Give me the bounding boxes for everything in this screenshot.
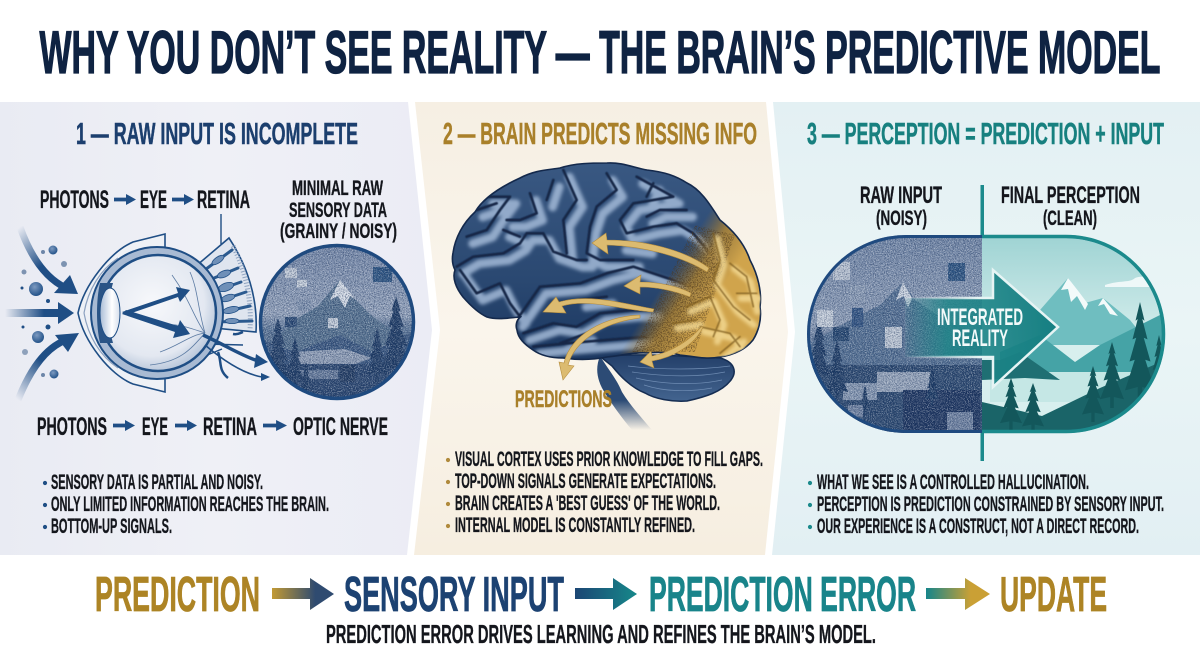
bullet list: panel 2: TOP-DOWN SIGNALS GENERATE EXPECTATIONS. (455, 469, 716, 493)
bullet list: panel 1: BOTTOM-UP SIGNALS. (51, 514, 172, 538)
arrow: prediction to sensory input (272, 578, 334, 610)
footer flow: prediction loop (95, 567, 1107, 622)
capsule: raw versus clean scene (805, 233, 1170, 435)
label: minimal raw sensory data: MINIMAL RAW (292, 177, 383, 200)
panel: brain predicts missing info: VISUAL CORTEX USES PRIOR KNOWLEDGE TO FILL GAPS. (455, 447, 763, 471)
label: minimal raw sensory data: SENSORY DATA (289, 199, 387, 222)
label: raw input noisy: RAW INPUT (860, 182, 942, 209)
step: update: UPDATE (1000, 567, 1107, 622)
flow label: photons to optic nerve: OPTIC NERVE (293, 414, 388, 441)
panel: raw input is incomplete (0, 102, 432, 555)
scene: clean right half (982, 235, 1170, 435)
panel: perception = prediction + input (772, 102, 1200, 555)
heading: panel 1: 1 — RAW INPUT IS INCOMPLETE (76, 117, 358, 151)
arrow: integrated reality: REALITY (952, 325, 1008, 352)
scene: noisy left half (805, 233, 983, 435)
step: prediction error: PREDICTION ERROR (649, 567, 916, 622)
label: final perception clean (1001, 182, 1140, 230)
bullet list: panel 1: ONLY LIMITED INFORMATION REACHES THE BRAIN. (51, 492, 329, 516)
flow label: photons to optic nerve (37, 414, 388, 441)
flow label: photons to optic nerve: PHOTONS (37, 414, 107, 441)
flow label: photons to optic nerve: RETINA (203, 414, 257, 441)
arrow: sensory input to prediction error (575, 578, 637, 610)
cerebellum (602, 355, 734, 401)
panel: brain predicts missing info (95, 102, 1200, 649)
step: prediction: PREDICTION (95, 567, 260, 622)
flow label: photons to optic nerve: EYE (142, 414, 168, 441)
flow label: photons to retina: PHOTONS (40, 187, 109, 214)
label: minimal raw sensory data: (GRAINY / NOISY) (280, 220, 397, 243)
arrows: predictions (543, 233, 709, 380)
icon: retina fan (196, 214, 256, 332)
bullet list: panel 2 (446, 447, 763, 537)
arrow: integrated reality: INTEGRATED (937, 304, 1023, 331)
divider: raw versus final (980, 185, 984, 461)
label: predictions: PREDICTIONS (515, 386, 612, 413)
bullet list: panel 1 (43, 470, 329, 538)
icon: optic nerve arrows (203, 332, 270, 381)
label: minimal raw sensory data (280, 177, 397, 243)
brain stem (597, 356, 652, 430)
flow label: photons to retina (40, 187, 250, 214)
label: raw input noisy: (NOISY) (876, 207, 927, 230)
icon: incoming photons (5, 227, 79, 400)
arrow: integrated reality (905, 270, 1058, 387)
bullet list: panel 1: SENSORY DATA IS PARTIAL AND NOISY. (51, 470, 263, 494)
cerebrum (452, 163, 761, 380)
icon: eye cross-section (78, 234, 243, 392)
bullet list: panel 2: INTERNAL MODEL IS CONSTANTLY REFINED. (455, 513, 695, 537)
flow label: photons to retina: RETINA (197, 187, 250, 214)
label: final perception clean: (CLEAN) (1043, 207, 1097, 230)
bullet list: panel 2: BRAIN CREATES A 'BEST GUESS' OF THE WORLD. (455, 491, 720, 515)
bullet list: panel 3 (808, 470, 1164, 538)
heading: panel 2: 2 — BRAIN PREDICTS MISSING INFO (443, 117, 757, 151)
step: sensory input: SENSORY INPUT (344, 567, 564, 622)
label: raw input noisy (860, 182, 942, 230)
illustration: brain with prediction arrows (446, 163, 763, 537)
image: grainy noisy sensory scene (258, 243, 416, 401)
arrow: prediction error to update (926, 578, 990, 610)
flow label: photons to retina: EYE (140, 187, 167, 214)
